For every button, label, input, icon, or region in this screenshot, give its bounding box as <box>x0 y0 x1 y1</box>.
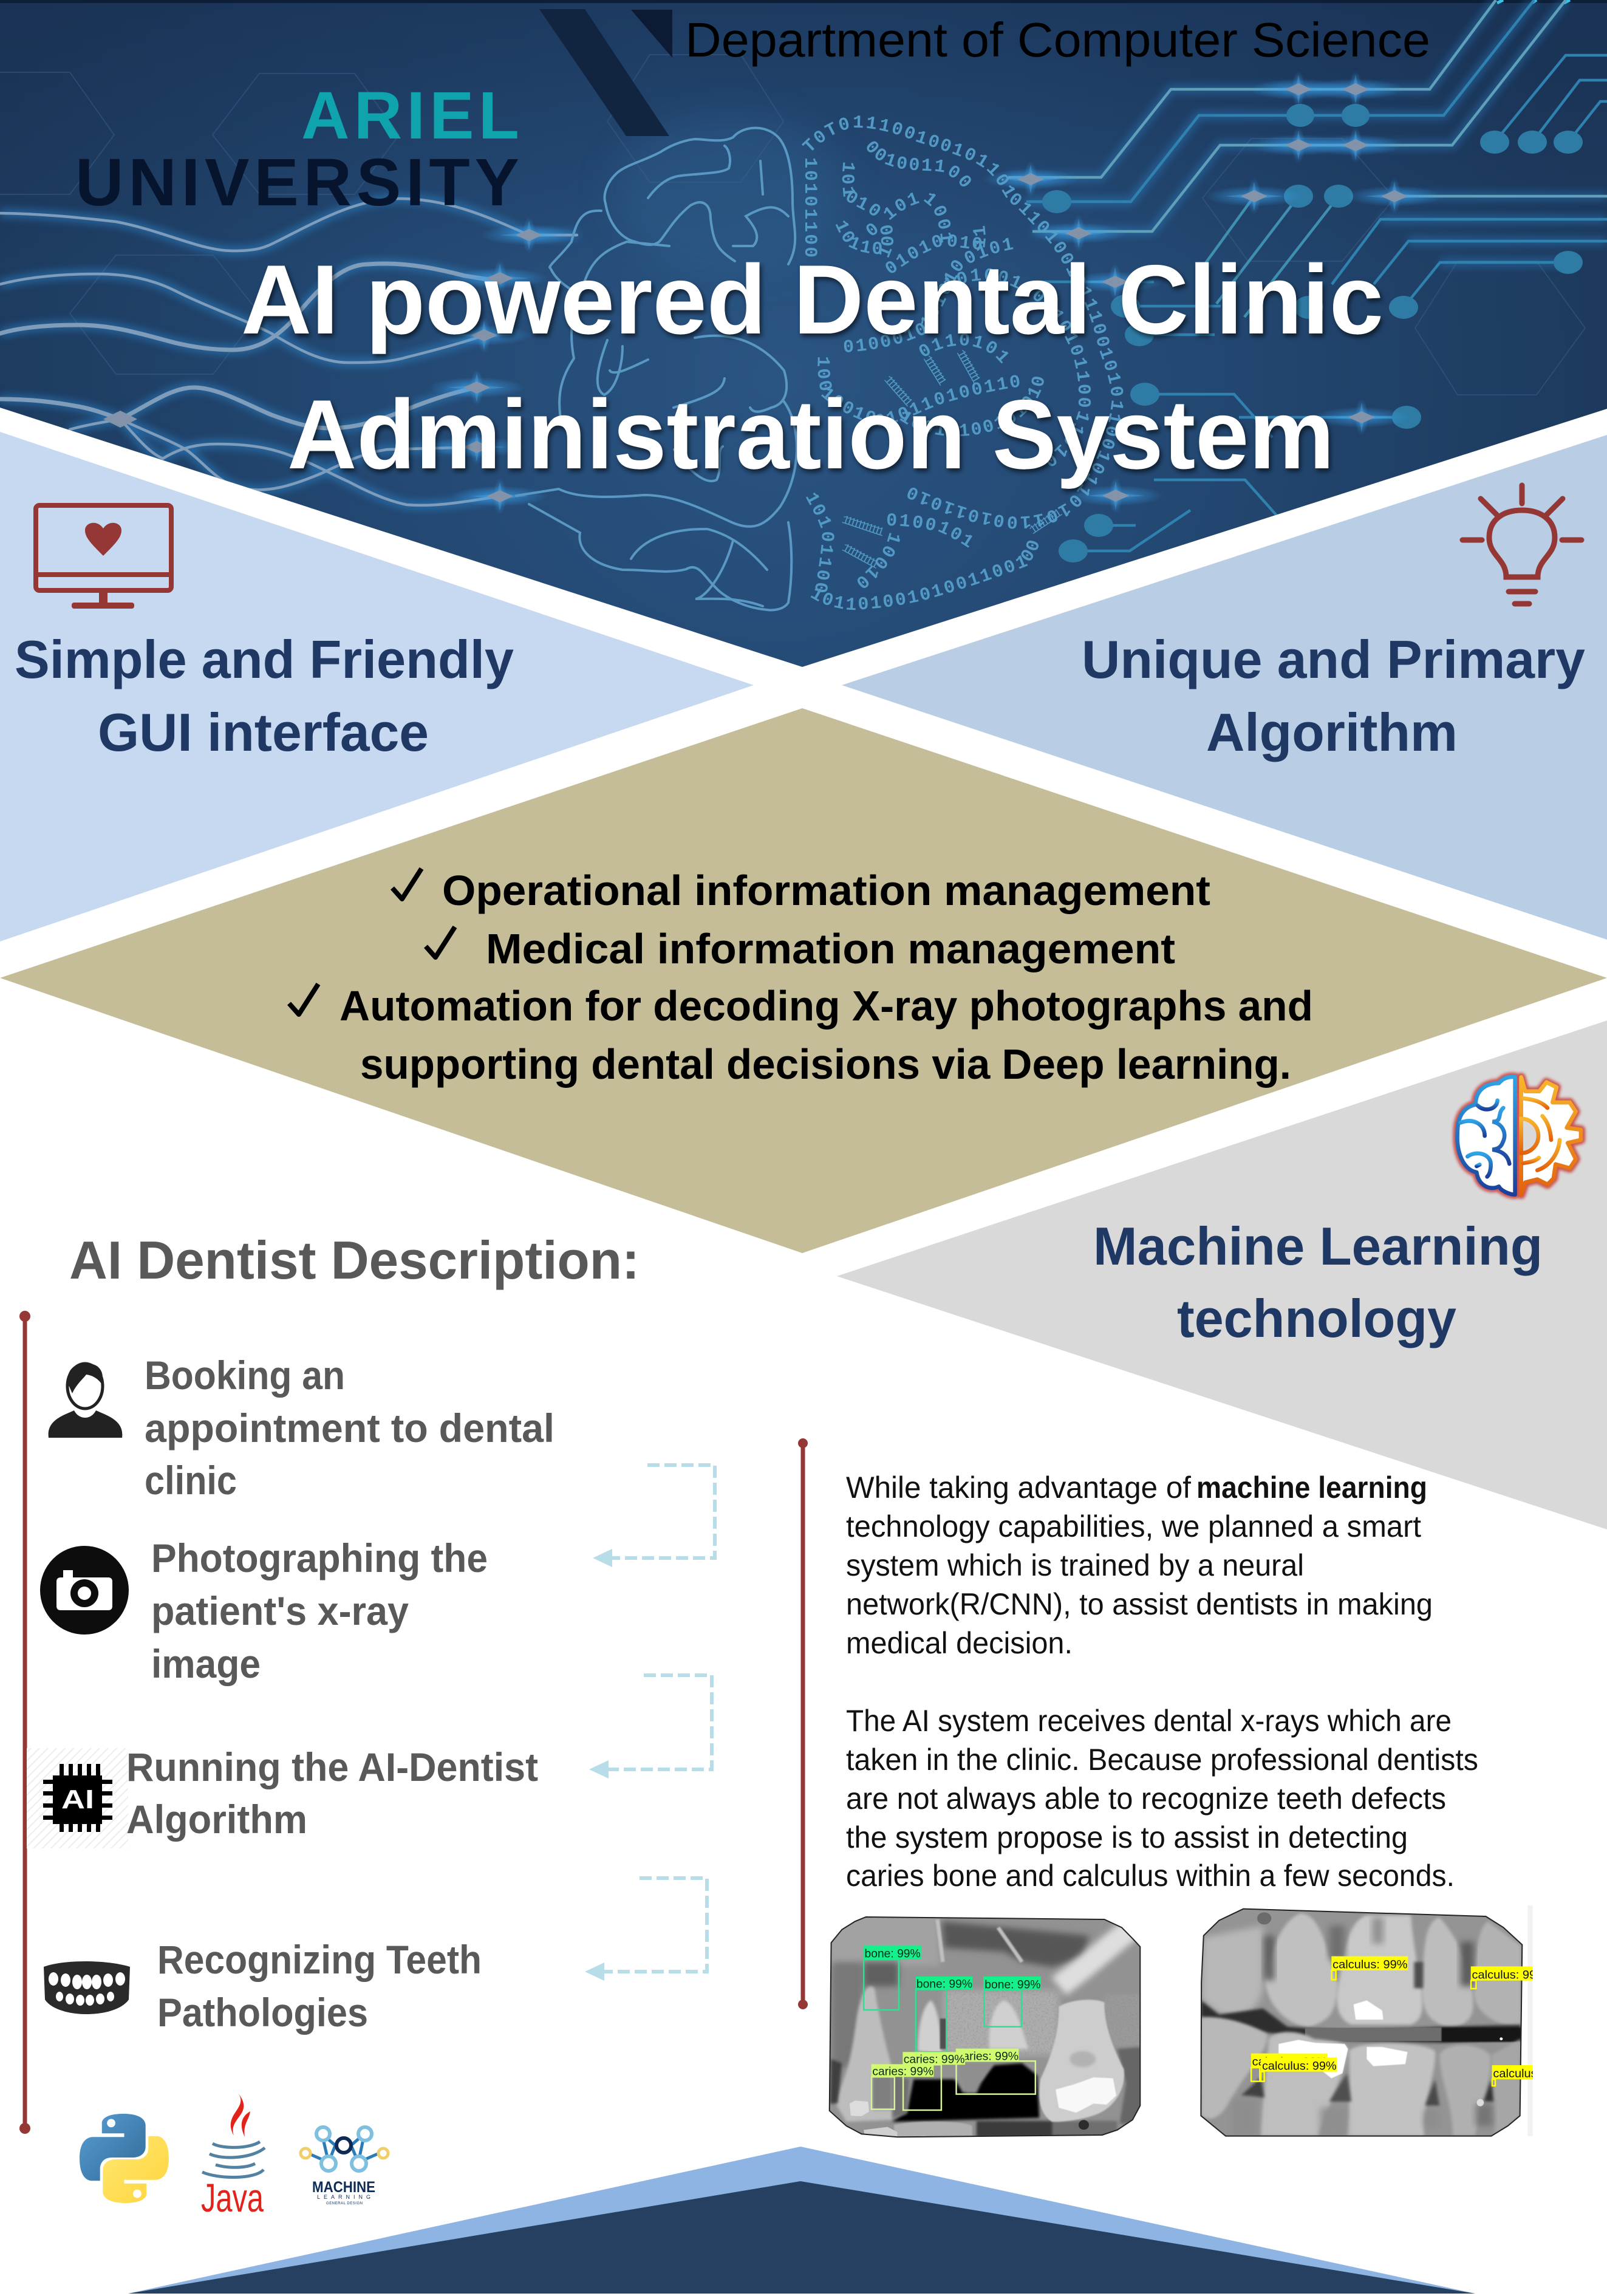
text: patient's x-ray <box>151 1588 409 1633</box>
text: image <box>151 1641 261 1686</box>
icon: light bulb <box>1462 485 1581 604</box>
description text: While taking advantage of <box>846 1471 1191 1505</box>
university logo: slash mark <box>539 9 672 136</box>
checkmarks <box>289 869 455 1014</box>
binary spiral: 11111111111111 <box>0 0 915 410</box>
detection labels: calculus: 99% <box>1472 1969 1547 1981</box>
logo: Python <box>80 2114 169 2203</box>
feature list: Operational information management <box>442 867 1210 914</box>
heading: Simple and Friendly <box>15 629 514 689</box>
circuit traces <box>1008 0 1607 262</box>
detection labels: calculus: 99% <box>1262 2060 1337 2072</box>
x-ray image: bitewing with calculus detections <box>1200 1905 1533 2137</box>
binary spiral: 01000101010100101 <box>844 238 1013 352</box>
detection labels: calculus: 99% <box>1252 2055 1327 2068</box>
heading <box>15 629 514 762</box>
binary spiral: 11111111111111 <box>0 0 983 386</box>
logo: machine learning: GENERAL DESIGN <box>326 2202 363 2205</box>
icon: AI chip <box>27 1748 128 1848</box>
header banner <box>0 0 1607 667</box>
logo: Java: Java <box>201 2175 264 2220</box>
logo: machine learning: LEARNING <box>317 2194 370 2200</box>
university logo: wordmark: ARIEL <box>301 78 519 153</box>
description text: The AI system receives dental x-rays which are <box>846 1704 1452 1738</box>
x-ray image: upper teeth with bone and caries detections <box>827 1913 1144 2140</box>
description text: the system propose is to assist in detecting <box>846 1820 1408 1854</box>
detection labels: bone: 99% <box>865 1947 921 1960</box>
binary spiral: 1010010011010110011010 <box>944 268 1091 466</box>
binary spiral: 0100101 <box>887 513 972 548</box>
panel: feature diamond <box>0 708 1607 1253</box>
detection labels: caries: 99% <box>957 2050 1018 2063</box>
step 2: x-ray photo <box>40 1536 488 1686</box>
arrow 1 <box>593 1465 715 1567</box>
icon: teeth <box>44 1961 130 2014</box>
step 4: teeth pathologies <box>44 1937 482 2035</box>
department label: Department of Computer Science <box>685 13 1430 67</box>
arrow 3 <box>585 1878 707 1981</box>
feature list: supporting dental decisions via Deep learning. <box>360 1040 1291 1088</box>
logo: machine learning <box>301 2127 388 2205</box>
icon: AI chip: AI <box>61 1785 94 1814</box>
feature list <box>339 867 1313 1088</box>
icon: camera <box>40 1546 129 1635</box>
description text: system which is trained by a neural <box>846 1548 1304 1582</box>
detection labels: caries: 99% <box>872 2065 933 2078</box>
binary spiral <box>802 115 1124 610</box>
text: Booking an <box>145 1353 345 1398</box>
university logo: wordmark: UNIVERSITY <box>75 145 519 220</box>
heading: Algorithm <box>1206 702 1458 762</box>
text <box>157 1937 482 2035</box>
binary spiral: 111111111111111111 <box>0 0 881 573</box>
heading <box>1082 629 1585 762</box>
main title <box>241 245 1384 490</box>
panel: simple and friendly GUI <box>0 432 754 941</box>
binary spiral: 10010100101010 <box>900 377 1044 436</box>
detection labels: calculus: 99% <box>1332 1958 1408 1971</box>
text: appointment to dental <box>145 1406 554 1450</box>
heading: technology <box>1177 1288 1456 1348</box>
detection labels: bone: 99% <box>984 1978 1041 1991</box>
text: Running the AI-Dentist <box>126 1744 538 1789</box>
description text <box>846 1471 1478 1893</box>
binary spiral: 101011001011010010100110010011001011001101001001 <box>806 493 1039 610</box>
text: Algorithm <box>126 1797 307 1842</box>
main title: Administration System <box>287 380 1334 490</box>
text: Pathologies <box>157 1990 368 2035</box>
detection labels: caries: 99% <box>904 2053 965 2066</box>
bottom chevron <box>128 2147 1475 2294</box>
description text: taken in the clinic. Because professional dentists <box>846 1743 1478 1777</box>
detection boxes <box>864 1959 1036 2110</box>
main title: AI powered Dental Clinic <box>241 245 1384 355</box>
binary spiral: 111111111111111111 <box>0 0 886 540</box>
binary spiral: 10010 <box>858 533 900 588</box>
brain outline <box>516 128 797 610</box>
binary spiral: 11111111111111 <box>0 0 949 389</box>
heading: GUI interface <box>98 702 429 762</box>
text: clinic <box>145 1458 237 1503</box>
binary spiral: 1111111111111111 <box>0 0 1065 538</box>
right timeline <box>798 1438 808 2009</box>
logo: Java <box>201 2093 265 2220</box>
description text: technology capabilities, we planned a smart <box>846 1509 1421 1543</box>
text <box>126 1744 538 1842</box>
detection labels <box>1250 1956 1533 2087</box>
icon: monitor with heart <box>36 505 171 609</box>
detection labels: bone: 99% <box>916 1978 972 1990</box>
icon: brain and gear <box>1458 1077 1581 1195</box>
step 3: AI algorithm <box>27 1744 538 1848</box>
description text: network(R/CNN), to assist dentists in making <box>846 1587 1433 1621</box>
detection labels <box>864 1946 1041 2078</box>
text: Photographing the <box>151 1536 488 1580</box>
arrow 2 <box>589 1675 712 1778</box>
heading: Machine Learning <box>1093 1216 1543 1276</box>
step 1: booking <box>49 1353 554 1503</box>
heading <box>1093 1216 1543 1348</box>
university logo: wordmark <box>75 78 519 220</box>
description text: medical decision. <box>846 1626 1073 1660</box>
description text: are not always able to recognize teeth defects <box>846 1782 1446 1816</box>
description text: caries bone and calculus within a few seconds. <box>846 1859 1455 1893</box>
panel: machine learning technology <box>837 1020 1607 1529</box>
feature list: Medical information management <box>486 925 1175 972</box>
feature list: Automation for decoding X-ray photographs and <box>339 982 1313 1030</box>
logo: machine learning: MACHINE <box>312 2179 375 2196</box>
binary spiral: 0110101 <box>920 333 1008 363</box>
text <box>151 1536 488 1686</box>
detection labels: calculus: 99% <box>1493 2068 1568 2080</box>
panel: unique and primary algorithm <box>842 435 1607 940</box>
description text: machine learning <box>1196 1471 1427 1505</box>
text <box>145 1353 554 1503</box>
text: Recognizing Teeth <box>157 1937 482 1982</box>
section heading: AI dentist description: AI Dentist Description: <box>69 1230 640 1290</box>
icon: person <box>49 1364 122 1438</box>
left timeline <box>19 1311 30 2134</box>
heading: Unique and Primary <box>1082 629 1585 689</box>
neural waves <box>0 199 577 505</box>
